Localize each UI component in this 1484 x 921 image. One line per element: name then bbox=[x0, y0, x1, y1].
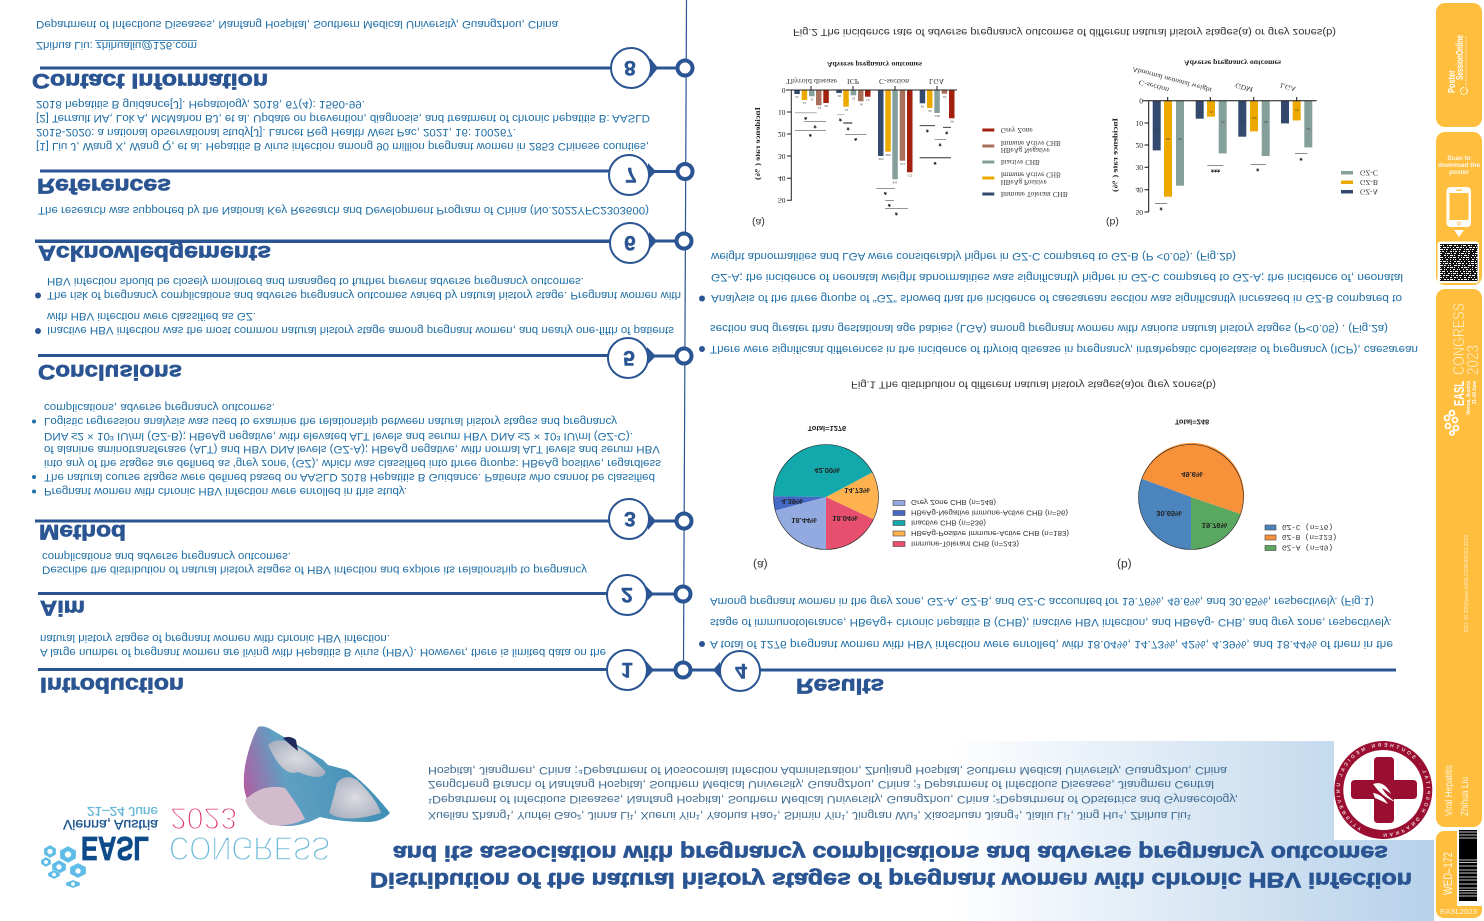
axes bbox=[786, 86, 957, 201]
sidebar location: Vienna, Austria bbox=[1466, 380, 1472, 415]
panel: introduction bbox=[38, 632, 720, 696]
results text: pregnancy outcomes: GZ-A; the incidence of neonatal weight abnormalities was significantly higher in GZ-C compared to GZ-A; the incidence of, neonatal bbox=[711, 271, 1403, 283]
significance brackets bbox=[1155, 153, 1307, 212]
significance brackets: * bbox=[1299, 153, 1303, 162]
authors and affiliations: Hospital, Jiangmen, China ;⁴Department of Nosocomial Infection Administration, Zhujiang Hospital, Southern Medical University, Guangzhou, China bbox=[428, 764, 1228, 776]
legend: bar chart a: Inactive CHB bbox=[1001, 158, 1040, 166]
bar value labels: 16 bbox=[859, 102, 863, 106]
section rule 2 bbox=[38, 592, 608, 595]
main title bbox=[370, 841, 1412, 891]
step marker 3: 3 bbox=[624, 507, 636, 530]
pie chart a: natural history stages: 4.39% bbox=[781, 497, 803, 506]
y axis title: Incidence rate ( %) bbox=[753, 107, 762, 181]
legend: pie b: GZ-A (n=49) bbox=[1282, 542, 1333, 550]
section rule 5 bbox=[38, 354, 611, 357]
legend: bar chart a: HBeAg Negative bbox=[1001, 146, 1050, 154]
bars: LGA bbox=[920, 90, 954, 118]
method bullets: DNA ≤2 × 10³ IU/ml (GZ-B); HBeAg negative, with elevated ALT levels and serum HBV DNA ≤2 × 10³ IU/ml (GZ-C). bbox=[44, 430, 633, 442]
pie chart b: grey zones bbox=[1138, 418, 1244, 550]
y tick labels: 40 bbox=[778, 174, 786, 183]
step marker 1: 1 bbox=[621, 658, 633, 681]
bars: thyroid disease bbox=[794, 90, 829, 105]
bar value labels: 12 bbox=[1283, 110, 1287, 114]
step marker 8 bbox=[611, 48, 692, 88]
panel: contact information bbox=[32, 18, 692, 92]
chart b panel label: (b) bbox=[1106, 216, 1119, 228]
pie chart b: grey zones: 19.76% bbox=[1202, 521, 1228, 530]
panel: method bbox=[32, 401, 692, 543]
significance brackets: * bbox=[945, 126, 949, 135]
bar value labels: 119 bbox=[1251, 116, 1257, 120]
y axis title: Incidence rate ( %) bbox=[1110, 118, 1120, 193]
results text: pregnancy outcomes: Analysis of the three groups of “GZ” showed that the incidence of caesarean section was significantly increased in GZ-B compared to bbox=[711, 292, 1402, 304]
pie chart b: grey zones: 49.6% bbox=[1181, 470, 1203, 479]
step marker 8: 8 bbox=[624, 56, 636, 79]
contact details bbox=[36, 18, 559, 51]
legend: pie b: GZ-B (n=123) bbox=[1282, 532, 1337, 540]
y tick labels: 0 bbox=[1139, 96, 1143, 106]
title band background bbox=[700, 741, 1434, 921]
results text: pregnancy outcomes bbox=[699, 250, 1418, 355]
category labels: Thyroid disease bbox=[786, 77, 837, 85]
bar value labels: 231 bbox=[900, 162, 905, 166]
bar value labels: 26 bbox=[1264, 120, 1268, 124]
heading: references: References bbox=[37, 174, 171, 197]
sidebar panel: scan to download bbox=[1436, 132, 1482, 285]
main title: and its association with pregnancy complications and adverse pregnancy outcomes bbox=[393, 841, 1388, 864]
sidebar CONGRESS: CONGRESS bbox=[1451, 303, 1468, 375]
panel: references bbox=[36, 98, 692, 197]
y tick labels: 50 bbox=[778, 196, 786, 205]
poster number: WED–172 bbox=[1441, 852, 1455, 895]
y tick labels: 40 bbox=[1136, 186, 1143, 194]
legend: bar chart b: GZ-C bbox=[1360, 168, 1378, 176]
category labels: ICP bbox=[847, 77, 859, 85]
chart title: Adverse pregnancy outcomes bbox=[1184, 58, 1281, 66]
conclusion bullets: with HBV infection were classified as GZ. bbox=[46, 310, 256, 322]
bar value labels: 18 bbox=[1241, 120, 1244, 124]
significance brackets: * bbox=[926, 124, 930, 133]
bar value labels: 13 bbox=[1209, 110, 1213, 114]
category labels bbox=[1131, 65, 1297, 94]
y tick labels: 10 bbox=[778, 108, 786, 117]
bar value labels: 24 bbox=[1307, 127, 1310, 131]
heading: method: Method bbox=[39, 520, 126, 543]
category labels: LGA bbox=[929, 77, 944, 85]
significance brackets: * bbox=[846, 122, 850, 131]
bar value labels: 200 bbox=[885, 153, 891, 157]
bar value labels: 14 bbox=[844, 108, 848, 112]
conclusion bullets: The risk of pregnancy complications and adverse pregnancy outcomes varied by natural history stage. Pregnant women with bbox=[47, 289, 681, 301]
main title: Distribution of the natural history stages of pregnant women with chronic HBV infection bbox=[370, 868, 1412, 891]
y tick labels: 20 bbox=[1136, 141, 1143, 150]
y tick labels bbox=[1136, 96, 1143, 217]
category labels: C-section bbox=[1138, 78, 1171, 94]
scan instruction: download the bbox=[1438, 162, 1480, 169]
contact details: Department of Infectious Diseases, Nanfang Hospital, Southern Medical University, Guangzhou, China bbox=[36, 18, 559, 30]
chart title: Adverse pregnancy outcomes bbox=[827, 60, 922, 68]
authors and affiliations bbox=[428, 764, 1238, 821]
category labels bbox=[786, 77, 944, 85]
significance brackets: * bbox=[933, 157, 937, 166]
method bullets: into any of the stages are defined as ‘grey zone’ (GZ), which was classified into three groups: HBeAg positive, regardless bbox=[44, 457, 662, 469]
step marker 2 bbox=[607, 575, 690, 615]
significance brackets: * bbox=[839, 114, 843, 123]
significance brackets bbox=[795, 112, 951, 217]
step marker 6: 6 bbox=[624, 231, 636, 254]
section rule 1 bbox=[38, 668, 608, 671]
results text: enrolment: stage of immunotolerance, HBeAg+ chronic hepatitis B (CHB), inactive HBV infection, and HBeAg- CHB, and grey zone, respectively. bbox=[710, 616, 1392, 628]
step marker 4 bbox=[713, 651, 760, 691]
wordmark: 2023: 2023 bbox=[170, 801, 237, 836]
y tick labels: 20 bbox=[778, 130, 786, 139]
legend: pie a: HBeAg-Negative Immune-Active CHB (n=56) bbox=[911, 508, 1069, 518]
bar value labels: 172 bbox=[907, 174, 913, 178]
dotted progress line bbox=[1465, 36, 1467, 85]
acknowledgement text: The research was supported by the National Key Research and Development Program of China (No.2022YFC2303600) bbox=[38, 204, 649, 216]
reference list: 2018 hepatitis B guidance[J]. Hepatology, 2018, 67(4): 1560-99. bbox=[36, 98, 365, 110]
bar value labels: 34 bbox=[928, 109, 932, 113]
aim text: Describe the distribution of natural history stages of HBV infection and explore its relationship to pregnancy bbox=[42, 564, 588, 576]
method bullets: of alanine aminotransferase (ALT) and HBV DNA levels (GZ-A); HBeAg negative, with normal ALT levels and serum HBV bbox=[44, 443, 661, 455]
pie chart a: natural history stages bbox=[773, 424, 879, 550]
pie chart a: natural history stages: 18.04% bbox=[832, 514, 858, 523]
session topic: Viral Hepatitis bbox=[1444, 765, 1455, 816]
legend: bar chart b: GZ-A bbox=[1360, 188, 1378, 196]
legend: bar chart b: GZ-B bbox=[1360, 178, 1378, 186]
significance brackets: * bbox=[938, 138, 942, 147]
step marker 5 bbox=[608, 338, 692, 378]
method bullets: The natural course stages were defined based on AASLD 2018 Hepatitis B Guidance. Patients who cannot be classified bbox=[44, 471, 655, 483]
scan instruction bbox=[1438, 155, 1480, 176]
results text: pregnancy outcomes: weight abnormalities and LGA were considerably higher in GZ-C compared to GZ-B (P <0.05). (Fig.2b) bbox=[710, 250, 1236, 262]
sidebar panel: poster session online bbox=[1436, 3, 1482, 127]
method bullets: Logistic regression analysis was used to examine the relationship between natural history stages and pregnancy bbox=[44, 415, 618, 427]
bar value labels bbox=[795, 94, 954, 184]
wordmark: CONGRESS: CONGRESS bbox=[169, 830, 330, 867]
legend: pie a: Grey Zone CHB (n=248) bbox=[911, 498, 997, 507]
bar chart a: outcomes by natural history stage bbox=[752, 60, 957, 228]
sidebar wordmark line two: SessionOnline bbox=[1455, 35, 1466, 80]
method bullets: Pregnant women with chronic HBV infection were enrolled in this study. bbox=[44, 485, 407, 497]
significance brackets: * bbox=[804, 112, 808, 121]
panel label b: (b) bbox=[1117, 558, 1132, 572]
icon: gear bbox=[1460, 88, 1468, 94]
significance brackets: * bbox=[1159, 202, 1163, 212]
authors and affiliations: Zengcheng Branch of Nanfang Hospital, Southern Medical University, Guangzhou, China ;³ Department of Infectious Diseases, Jiangmen Central bbox=[428, 778, 1214, 790]
icon: EASL hepatocyte cluster bbox=[41, 845, 86, 888]
wordmark: EASL: EASL bbox=[81, 830, 149, 867]
section rule 6 bbox=[35, 240, 611, 243]
icon: liver bbox=[244, 726, 390, 826]
hospital seal logo: NANFANG HOSPITAL · SOUTHERN MEDICAL UNIVERSITY bbox=[1336, 743, 1430, 837]
step marker 2: 2 bbox=[621, 583, 633, 606]
arrow to QR code bbox=[1454, 230, 1464, 237]
legend: pie a: HBeAg-Positive Immune-Active CHB (n=183) bbox=[911, 529, 1070, 538]
step marker 1 bbox=[607, 650, 720, 690]
legend: bar chart a: Grey Zone bbox=[1001, 126, 1033, 134]
heading: acknowledgements: Acknowledgements bbox=[38, 241, 271, 264]
results text: pregnancy outcomes: section and greater than gestational age babies (LGA) among pregnant women with various natural history stages (P<0.05) . (Fig.2a) bbox=[710, 322, 1388, 334]
bar value labels: 41 bbox=[803, 101, 806, 105]
significance brackets: * bbox=[895, 208, 899, 217]
bar value labels: 451 bbox=[892, 180, 898, 184]
bar value labels: 18 bbox=[837, 94, 841, 98]
y tick labels: 50 bbox=[1136, 208, 1143, 217]
legend: pie a bbox=[893, 498, 1070, 548]
bar value labels: 33 bbox=[852, 96, 856, 100]
authors and affiliations: Xuelian Zhang¹, Yunfei Gao², Jinna Li¹, Xuerui Yin¹, Yaohua Hao¹, Shimin Yin¹, Jingran Wu³, Xiaoshuan Jiang⁴, Jialiu Li¹, Jing Hu⁴, Zhihua Liu¹ bbox=[428, 809, 1191, 821]
section rule 7 bbox=[40, 170, 610, 172]
bars: C-section bbox=[878, 90, 912, 179]
bar value labels: 10 bbox=[1198, 110, 1202, 114]
y tick labels: 10 bbox=[1136, 119, 1143, 128]
icon: phone bbox=[1446, 187, 1471, 227]
contact details: Zhihua Liu: zhihualiu@126.com bbox=[36, 39, 197, 51]
method bullets: complications, adverse pregnancy outcomes. bbox=[44, 401, 275, 413]
bar chart b: outcomes by grey zone group bbox=[1106, 58, 1317, 228]
panel label a: (a) bbox=[753, 558, 768, 572]
category labels: GDM bbox=[1234, 81, 1255, 94]
significance brackets: * bbox=[884, 187, 888, 196]
icon: sidebar cell cluster bbox=[1444, 410, 1458, 435]
heading: results: Results bbox=[796, 674, 884, 697]
bar value labels: 31 bbox=[810, 98, 814, 102]
EASL congress logo bbox=[41, 726, 390, 888]
scan instruction: poster bbox=[1449, 169, 1469, 176]
heading: contact information: Contact Information bbox=[32, 69, 268, 92]
heading: conclusions: Conclusions bbox=[38, 360, 182, 383]
bar value labels: 59 bbox=[950, 120, 954, 124]
conclusion bullets: Inactive HBV infection was the most common natural history stage among pregnant women, and nearly one-fifth of patients bbox=[47, 324, 675, 336]
heading: introduction: Introduction bbox=[40, 673, 184, 696]
aim text: complications and adverse pregnancy outcomes. bbox=[42, 550, 291, 562]
y tick labels bbox=[778, 86, 786, 205]
bar value labels: 13 bbox=[866, 98, 870, 102]
reference list bbox=[36, 98, 650, 152]
pie chart a: natural history stages: 14.73% bbox=[844, 486, 870, 495]
significance brackets: * bbox=[888, 199, 892, 208]
legend: pie a: Inactive CHB (n=536) bbox=[911, 518, 987, 528]
conclusion bullets: HBV infection should be closely monitored and managed to further prevent adverse pregnancy outcomes. bbox=[47, 275, 584, 287]
panel: results bbox=[699, 26, 1418, 697]
bar value labels: 14 bbox=[817, 106, 821, 110]
results text: enrolment bbox=[699, 595, 1393, 650]
y tick labels: 30 bbox=[778, 152, 786, 161]
bar value labels: 18 bbox=[1295, 108, 1299, 112]
panel: acknowledgements bbox=[35, 204, 692, 264]
legend: bar chart a: Immune Active CHB bbox=[1001, 170, 1061, 178]
legend: bar chart a: HBeAg Positive bbox=[1001, 178, 1047, 186]
pie chart a: natural history stages: Total=1276 bbox=[808, 424, 846, 433]
bar value labels: 101 bbox=[1165, 137, 1171, 141]
section rule 3 bbox=[35, 520, 609, 522]
step marker 6 bbox=[610, 223, 692, 263]
bar value labels: 24 bbox=[1155, 128, 1159, 132]
y tick labels: 30 bbox=[1136, 163, 1143, 172]
bars: ICP bbox=[836, 90, 870, 107]
category labels: C-section bbox=[879, 77, 910, 85]
legend: pie b bbox=[1265, 522, 1337, 550]
sidebar 2023: 2023 bbox=[1465, 345, 1482, 375]
pie chart a: natural history stages: 18.44% bbox=[791, 516, 817, 525]
bar value labels: 25 bbox=[1221, 120, 1225, 124]
barcode bbox=[1457, 830, 1482, 906]
conclusion bullets bbox=[35, 275, 681, 336]
authors and affiliations: ¹Department of Infectious Diseases, Nanfang Hospital, Southern Medical University, Guangzhou, China ;²Department of Obstetrics and Gynaecology, bbox=[428, 793, 1238, 805]
pie chart b: grey zones: 30.65% bbox=[1156, 509, 1182, 518]
reference list: [2] Terrault NA, Lok A, McMahon BJ, et al. Update on prevention, diagnosis, and treatment of chronic hepatitis B: AASLD bbox=[36, 112, 650, 124]
introduction text: natural history stages of pregnant women with chronic HBV infection. bbox=[40, 632, 390, 644]
introduction text bbox=[40, 632, 606, 658]
reference list: [1] Liu J, Wang X, Wang Q, et al. Hepatitis B virus infection among 90 million pregnant women in 2853 Chinese counties, bbox=[36, 140, 649, 152]
scan instruction: Scan to bbox=[1447, 155, 1471, 162]
vertical timeline bbox=[684, 0, 686, 662]
aim text bbox=[42, 550, 588, 576]
reference list: 2015-2020: a national observational study[J]. Lancet Reg Health West Pac, 2021, 16: 100267. bbox=[36, 126, 516, 138]
bar value labels: 45 bbox=[921, 104, 924, 108]
axes bbox=[1143, 97, 1317, 212]
congress tag: EASL2023 bbox=[1440, 907, 1477, 916]
results text: enrolment: A total of 1276 pregnant women with HBV infection were enrolled, with 18.04%, 14.73%, 42%, 4.39%, and 18.44% of them in the bbox=[710, 638, 1393, 650]
legend: bar chart a bbox=[982, 126, 1068, 198]
sidebar wordmark: Poster bbox=[1447, 70, 1458, 93]
significance brackets: * bbox=[813, 121, 817, 130]
significance brackets: *** bbox=[1211, 164, 1221, 174]
legend: bar chart a: Immune Tolerant CHB bbox=[1001, 190, 1068, 198]
legend: pie b: GZ-C (n=76) bbox=[1282, 522, 1333, 530]
results text: enrolment: Among pregnant women in the grey zone, GZ-A, GZ-B, and GZ-C accounted for 19.76%, 49.6%, and 30.65%, respectively. (Fig.1) bbox=[710, 595, 1374, 607]
bar value labels: 29 bbox=[1178, 137, 1182, 141]
heading: aim: Aim bbox=[40, 596, 85, 619]
legend: bar chart b bbox=[1341, 168, 1378, 196]
significance brackets: * bbox=[854, 133, 858, 142]
sidebar panel: congress branding bbox=[1436, 289, 1482, 827]
bar value labels bbox=[1155, 108, 1310, 141]
chart a panel label: (a) bbox=[752, 216, 765, 228]
presenter name: Zhihua Liu bbox=[1460, 777, 1471, 816]
congress dates: 21–24 June bbox=[87, 804, 158, 819]
step marker 7: 7 bbox=[625, 163, 637, 186]
figure 2 caption: Fig.2 The incidence rate of adverse pregnancy outcomes of different natural history stages(a) or grey zones(b) bbox=[793, 26, 1336, 38]
sidebar dates: 21–24 June bbox=[1472, 381, 1478, 404]
congress location: Vienna, Austria bbox=[63, 817, 158, 833]
step marker 4: 4 bbox=[735, 659, 747, 682]
sidebar panel: poster ID bbox=[1436, 830, 1482, 918]
results text: pregnancy outcomes: There were significant differences in the incidence of thyroid disease in pregnancy, intrahepatic cholestasis of pregnancy (ICP), caesarean bbox=[710, 343, 1418, 355]
bars bbox=[1153, 101, 1312, 197]
step marker 7 bbox=[609, 155, 692, 195]
QR code bbox=[1438, 242, 1479, 283]
category labels: LGA bbox=[1279, 81, 1297, 93]
figure 1 caption: Fig.1 The distribution of different natural history stages(a)or grey zones(b) bbox=[851, 378, 1216, 390]
bar value labels: 203 bbox=[878, 157, 884, 161]
section rule 8 bbox=[40, 66, 612, 70]
method bullets bbox=[32, 401, 662, 497]
introduction text: A large number of pregnant women are living with Hepatitis B virus (HBV). However, there is limited data on the bbox=[40, 646, 606, 658]
pie chart b: grey zones: Total=248 bbox=[1175, 418, 1209, 426]
sidebar EASL: EASL bbox=[1451, 381, 1468, 406]
legend: pie a: Immune-Tolerant CHB (n=243) bbox=[911, 540, 1020, 548]
bar value labels: 18 bbox=[943, 95, 946, 99]
bar value labels: 29 bbox=[824, 104, 828, 108]
significance brackets: * bbox=[809, 129, 813, 138]
bar value labels: 129 bbox=[934, 114, 940, 118]
bar value labels: 21 bbox=[795, 95, 799, 99]
panel: aim bbox=[38, 550, 690, 619]
legend: bar chart a: Immune Active CHB bbox=[1001, 139, 1061, 147]
section rule 4 bbox=[760, 668, 1396, 672]
panel: conclusions bbox=[35, 275, 692, 383]
significance brackets: * bbox=[1256, 164, 1260, 172]
pie chart a: natural history stages: 42.00% bbox=[814, 466, 840, 475]
step marker 3 bbox=[609, 499, 692, 539]
y tick labels: 0 bbox=[782, 86, 786, 95]
category labels: Abnormal neonatal weight bbox=[1131, 65, 1213, 94]
step marker 5: 5 bbox=[623, 346, 635, 369]
DOI: DOI: 10.3252/pose.EASLCONGRESS.2023 bbox=[1464, 535, 1470, 632]
